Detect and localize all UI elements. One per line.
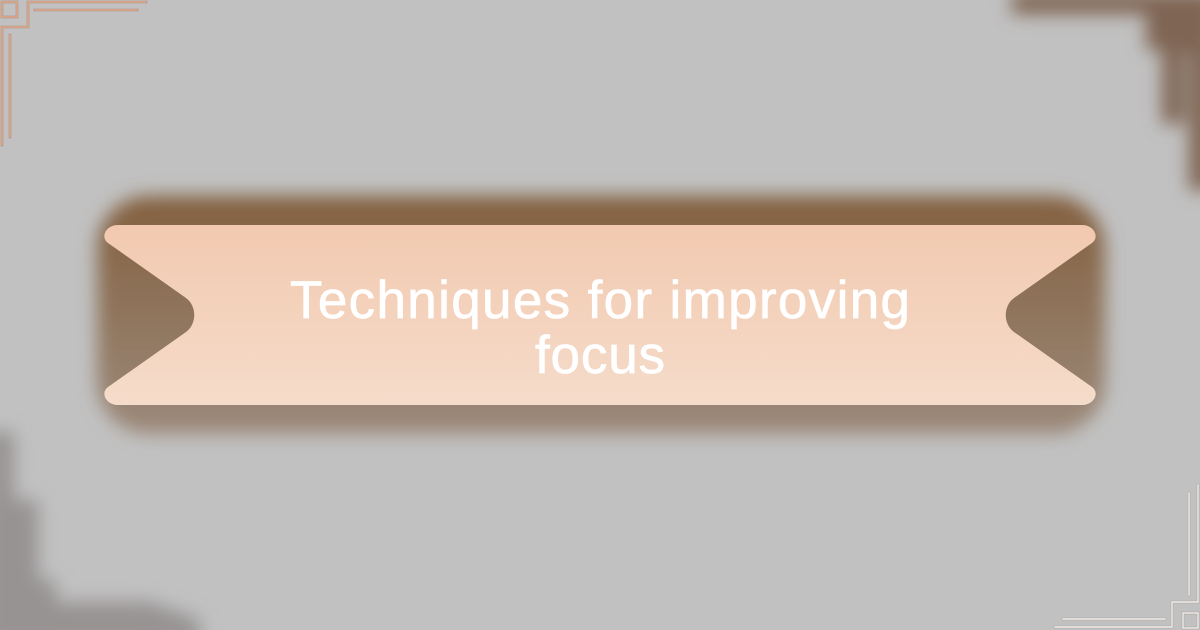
ribbon banner: [104, 225, 1096, 405]
corner ornament: top left: [2, 2, 146, 145]
blurred corner ornament: bottom left: [0, 432, 200, 630]
ribbon shadow: [97, 196, 1105, 434]
title: focus: [535, 326, 665, 385]
blurred corner ornament: top right: [1012, 0, 1200, 190]
corner ornament: bottom right: [1055, 485, 1198, 628]
title: Techniques for improving: [290, 271, 910, 330]
title: [290, 271, 910, 385]
